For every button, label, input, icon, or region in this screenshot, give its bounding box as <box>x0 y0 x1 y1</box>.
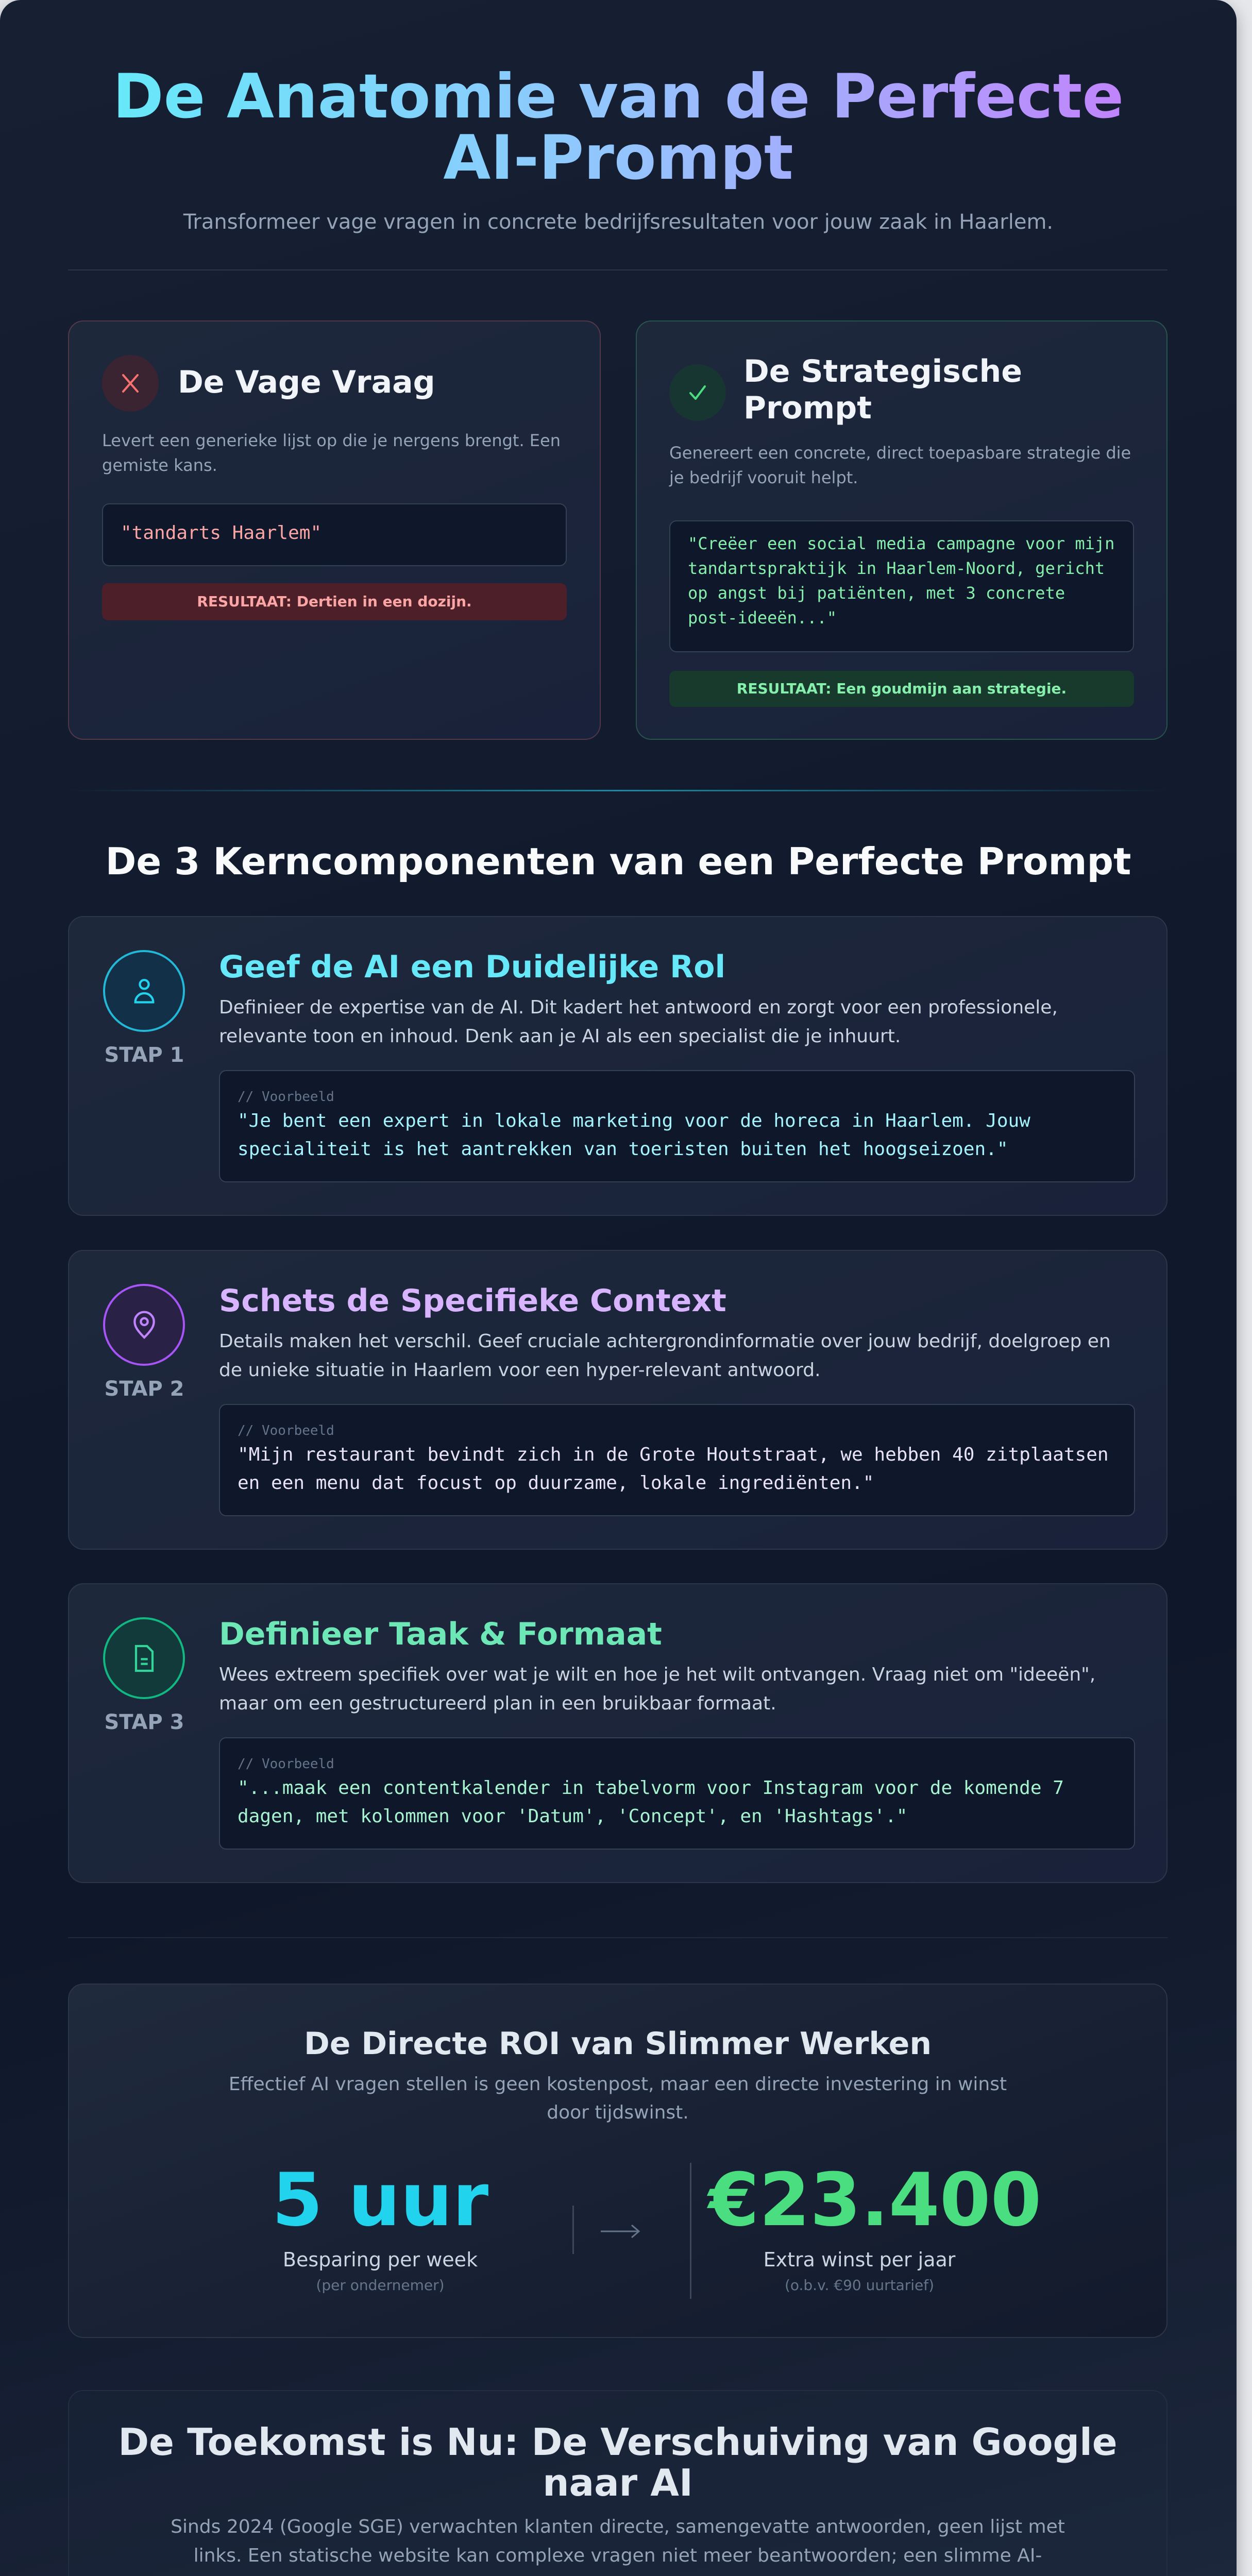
code example: // Voorbeeld <box>238 1756 334 1772</box>
heading: De Strategische Prompt: De Strategische <box>743 353 1022 389</box>
code example <box>219 1070 1135 1182</box>
label: stap 1: STAP 1 <box>104 1043 184 1067</box>
text <box>229 2074 1007 2123</box>
code: strategic prompt: post-ideeën..." <box>688 608 837 628</box>
text: description: je bedrijf vooruit helpt. <box>669 468 858 487</box>
stat: 5 uur <box>272 2158 488 2294</box>
result bar: RESULTAAT: Een goudmijn aan strategie. <box>737 680 1067 697</box>
code example: "Je bent een expert in lokale marketing voor de horeca in Haarlem. Jouw <box>238 1110 1030 1131</box>
icon: document <box>103 1617 185 1699</box>
icon: cross <box>102 355 159 412</box>
heading: Schets de Specifieke Context <box>219 1283 726 1319</box>
result bar: RESULTAAT: Dertien in een dozijn. <box>197 593 472 610</box>
text <box>219 997 1058 1047</box>
heading: Definieer Taak & Formaat <box>219 1616 662 1652</box>
heading: De Toekomst is Nu: De Verschuiving van Google <box>118 2420 1118 2464</box>
text: description: gemiste kans. <box>102 455 217 475</box>
stat: €23.400 <box>707 2158 1041 2294</box>
code: strategic prompt: "Creëer een social media campagne voor mijn <box>688 534 1114 553</box>
title: De Anatomie van de Perfecte <box>113 61 1124 132</box>
text: de unieke situatie in Haarlem voor een hyper-relevant antwoord. <box>219 1360 821 1381</box>
text: door tijdswinst. <box>547 2102 689 2123</box>
icon: check <box>669 364 726 421</box>
icon: person <box>103 950 185 1032</box>
panel: step 3 <box>68 1583 1168 1883</box>
stat: 5 uur: 5 uur <box>272 2158 488 2243</box>
code example: // Voorbeeld <box>238 1089 334 1105</box>
heading: Geef de AI een Duidelijke Rol <box>219 949 725 985</box>
text <box>171 2516 1065 2576</box>
heading: naar AI <box>543 2461 693 2504</box>
subtitle: Transformeer vage vragen in concrete bedrijfsresultaten voor jouw zaak in Haarlem. <box>183 210 1053 234</box>
panel: ROI <box>68 1984 1168 2338</box>
result bar <box>102 583 567 620</box>
code example <box>219 1404 1135 1516</box>
panel: strategic prompt <box>636 320 1168 740</box>
heading <box>118 2420 1118 2504</box>
text: description: Levert een generieke lijst op die je nergens brengt. Een <box>102 431 561 450</box>
code example: "Mijn restaurant bevindt zich in de Grote Houtstraat, we hebben 40 zitplaatsen <box>238 1444 1109 1465</box>
text: Sinds 2024 (Google SGE) verwachten klanten directe, samengevatte antwoorden, geen lijst met <box>171 2516 1065 2537</box>
stat: €23.400: (o.b.v. €90 uurtarief) <box>785 2277 934 2294</box>
code example: specialiteit is het aantrekken van toeristen buiten het hoogseizoen." <box>238 1139 1008 1160</box>
code example <box>219 1737 1135 1850</box>
text: description: Genereert een concrete, direct toepasbare strategie die <box>669 443 1131 463</box>
text <box>219 1664 1095 1714</box>
text: Effectief AI vragen stellen is geen kostenpost, maar een directe investering in winst <box>229 2074 1007 2095</box>
panel: toekomst <box>68 2390 1168 2576</box>
stat: €23.400: Extra winst per jaar <box>764 2248 955 2271</box>
heading: 3 kerncomponenten: De 3 Kerncomponenten van een Perfecte Prompt <box>106 840 1131 883</box>
text <box>219 1331 1111 1381</box>
text: description <box>102 431 561 475</box>
code: vague prompt <box>102 503 567 566</box>
panel: step 2 <box>68 1250 1168 1550</box>
heading: De Strategische Prompt <box>743 353 1022 426</box>
text: relevante toon en inhoud. Denk aan je AI als een specialist die je inhuurt. <box>219 1026 901 1047</box>
panel: step 1 <box>68 916 1168 1216</box>
title: AI-Prompt <box>443 123 793 194</box>
label: stap 3: STAP 3 <box>104 1710 184 1734</box>
panel: vague question <box>68 320 601 740</box>
code: vague prompt: "tandarts Haarlem" <box>121 522 322 544</box>
text: Definieer de expertise van de AI. Dit kadert het antwoord en zorgt voor een professionele, <box>219 997 1058 1018</box>
code example: en een menu dat focust op duurzame, lokale ingrediënten." <box>238 1472 874 1494</box>
code: strategic prompt: op angst bij patiënten, met 3 concrete <box>688 583 1065 603</box>
stat: €23.400: €23.400 <box>708 2158 1041 2243</box>
icon: arrow <box>601 2225 640 2238</box>
stat: 5 uur: Besparing per week <box>283 2248 478 2271</box>
label: stap 2: STAP 2 <box>104 1377 184 1401</box>
text: links. Een statische website kan complexe vragen niet meer beantwoorden; een slimme AI- <box>194 2545 1042 2566</box>
result bar <box>669 671 1134 707</box>
text: maar om een gestructureerd plan in een bruikbaar formaat. <box>219 1693 776 1714</box>
text: Details maken het verschil. Geef cruciale achtergrondinformatie over jouw bedrijf, doelgroep en <box>219 1331 1111 1352</box>
code example: "...maak een contentkalender in tabelvorm voor Instagram voor de komende 7 <box>238 1777 1064 1799</box>
heading: De Directe ROI van Slimmer Werken <box>304 2026 932 2062</box>
text: description <box>669 443 1131 487</box>
heading: De Vage Vraag: De Vage Vraag <box>178 364 435 400</box>
stat: 5 uur: (per ondernemer) <box>316 2277 445 2294</box>
heading: De Strategische Prompt: Prompt <box>743 390 872 426</box>
title <box>113 61 1124 194</box>
code example: dagen, met kolommen voor 'Datum', 'Concept', en 'Hashtags'." <box>238 1806 907 1827</box>
code: strategic prompt: tandartspraktijk in Haarlem-Noord, gericht <box>688 558 1105 578</box>
code: strategic prompt <box>669 520 1134 652</box>
code example: // Voorbeeld <box>238 1423 334 1438</box>
icon: location pin <box>103 1284 185 1366</box>
text: Wees extreem specifiek over wat je wilt en hoe je het wilt ontvangen. Vraag niet om "ideeën", <box>219 1664 1095 1685</box>
